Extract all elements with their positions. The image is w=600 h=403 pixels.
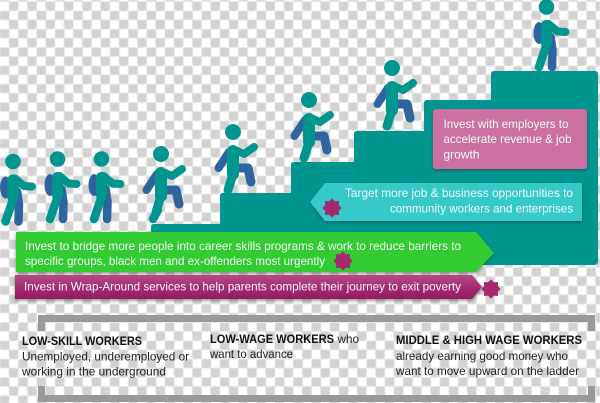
figure 7: climber bbox=[378, 60, 413, 126]
text block: low-wage workers: who bbox=[337, 332, 359, 346]
figure 3: walker bbox=[88, 151, 120, 219]
text block: low-skill workers: Unemployed, underemployed or bbox=[22, 350, 189, 364]
panel: invest with employers: growth bbox=[444, 148, 480, 162]
figure 8: walker at top bbox=[534, 0, 566, 67]
text block: low-skill workers bbox=[21, 334, 189, 378]
figure 4: climber bbox=[146, 146, 182, 219]
arrow panel: wrap-around services bbox=[15, 275, 482, 299]
figure 2: walker bbox=[44, 151, 76, 219]
text block: low-wage workers: LOW-WAGE WORKERS bbox=[210, 332, 334, 346]
text block: middle and high wage workers bbox=[395, 333, 582, 378]
text block: middle and high wage workers: want to move upward on the ladder bbox=[395, 364, 579, 378]
text block: low-skill workers: working in the underground bbox=[21, 364, 166, 378]
bottom bracket bbox=[38, 386, 595, 402]
figure 6: climber bbox=[294, 92, 330, 158]
panel: invest with employers bbox=[433, 109, 587, 169]
arrow panel: target more jobs: Target more job & business opportunities to bbox=[345, 186, 573, 200]
text block: low-wage workers: want to advance bbox=[209, 347, 293, 361]
top bracket bbox=[38, 315, 595, 331]
text block: low-wage workers bbox=[209, 332, 359, 361]
panel: invest with employers: accelerate revenue & job bbox=[444, 132, 572, 146]
panel: invest with employers: Invest with employers to bbox=[444, 117, 569, 131]
arrow panel: target more jobs: community workers and enterprises bbox=[390, 202, 573, 216]
arrow panel: target more jobs bbox=[310, 183, 582, 221]
icon: star on target arrow bbox=[322, 198, 342, 218]
figure 1: walker bbox=[0, 154, 32, 222]
text block: middle and high wage workers: MIDDLE & HIGH WAGE WORKERS bbox=[396, 333, 582, 347]
arrow panel: wrap-around services: Invest in Wrap-Around services to help parents complete their journey to exit poverty bbox=[24, 280, 461, 294]
arrow panel: career skills programs: Invest to bridge more people into career skills programs & work to reduce barriers to bbox=[25, 239, 461, 253]
figure 5: climber bbox=[218, 124, 254, 190]
icon: star on maroon arrow bbox=[481, 279, 501, 299]
arrow panel: career skills programs: specific groups, black men and ex-offenders most urgently bbox=[25, 254, 325, 268]
text block: middle and high wage workers: already earning good money who bbox=[396, 349, 568, 363]
staircase bbox=[151, 71, 598, 265]
text block: low-skill workers: LOW-SKILL WORKERS bbox=[22, 334, 142, 348]
icon: star on green arrow bbox=[333, 251, 353, 271]
arrow panel: career skills programs bbox=[16, 232, 494, 272]
